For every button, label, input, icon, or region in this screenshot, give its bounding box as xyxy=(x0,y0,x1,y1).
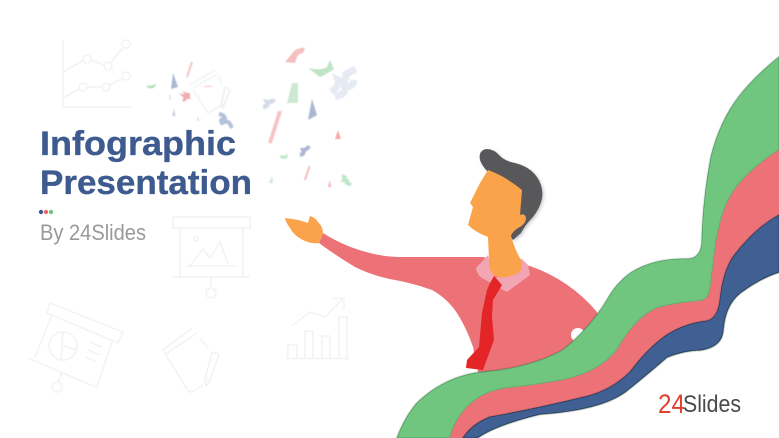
title: Presentation xyxy=(40,164,252,202)
background icon: tilted presentation board xyxy=(28,303,123,392)
logo: 24Slides xyxy=(658,389,741,419)
wave: blue layer xyxy=(463,215,779,438)
background icon: bar chart with arrow xyxy=(285,298,349,358)
person illustration xyxy=(285,149,610,375)
wave: green layer xyxy=(397,57,779,438)
confetti: right cluster xyxy=(263,48,356,187)
shirt button xyxy=(571,328,585,342)
logo: 24Slides: 24 xyxy=(658,389,685,419)
title: Infographic xyxy=(40,125,236,163)
background icon: notebook and pencil xyxy=(163,328,219,392)
accent dots xyxy=(39,210,53,214)
hair xyxy=(480,149,542,240)
background icon: projector screen xyxy=(173,217,250,298)
face and neck xyxy=(468,170,526,277)
necktie xyxy=(466,276,502,370)
hand xyxy=(285,216,323,243)
wave: red layer xyxy=(450,150,779,438)
logo: 24Slides: Slides xyxy=(683,391,741,418)
shirt collar xyxy=(476,255,530,292)
subtitle: By 24Slides xyxy=(40,220,146,245)
shirt and arm xyxy=(319,233,610,375)
background icon: line chart xyxy=(63,40,131,107)
confetti: left cluster xyxy=(147,62,232,128)
